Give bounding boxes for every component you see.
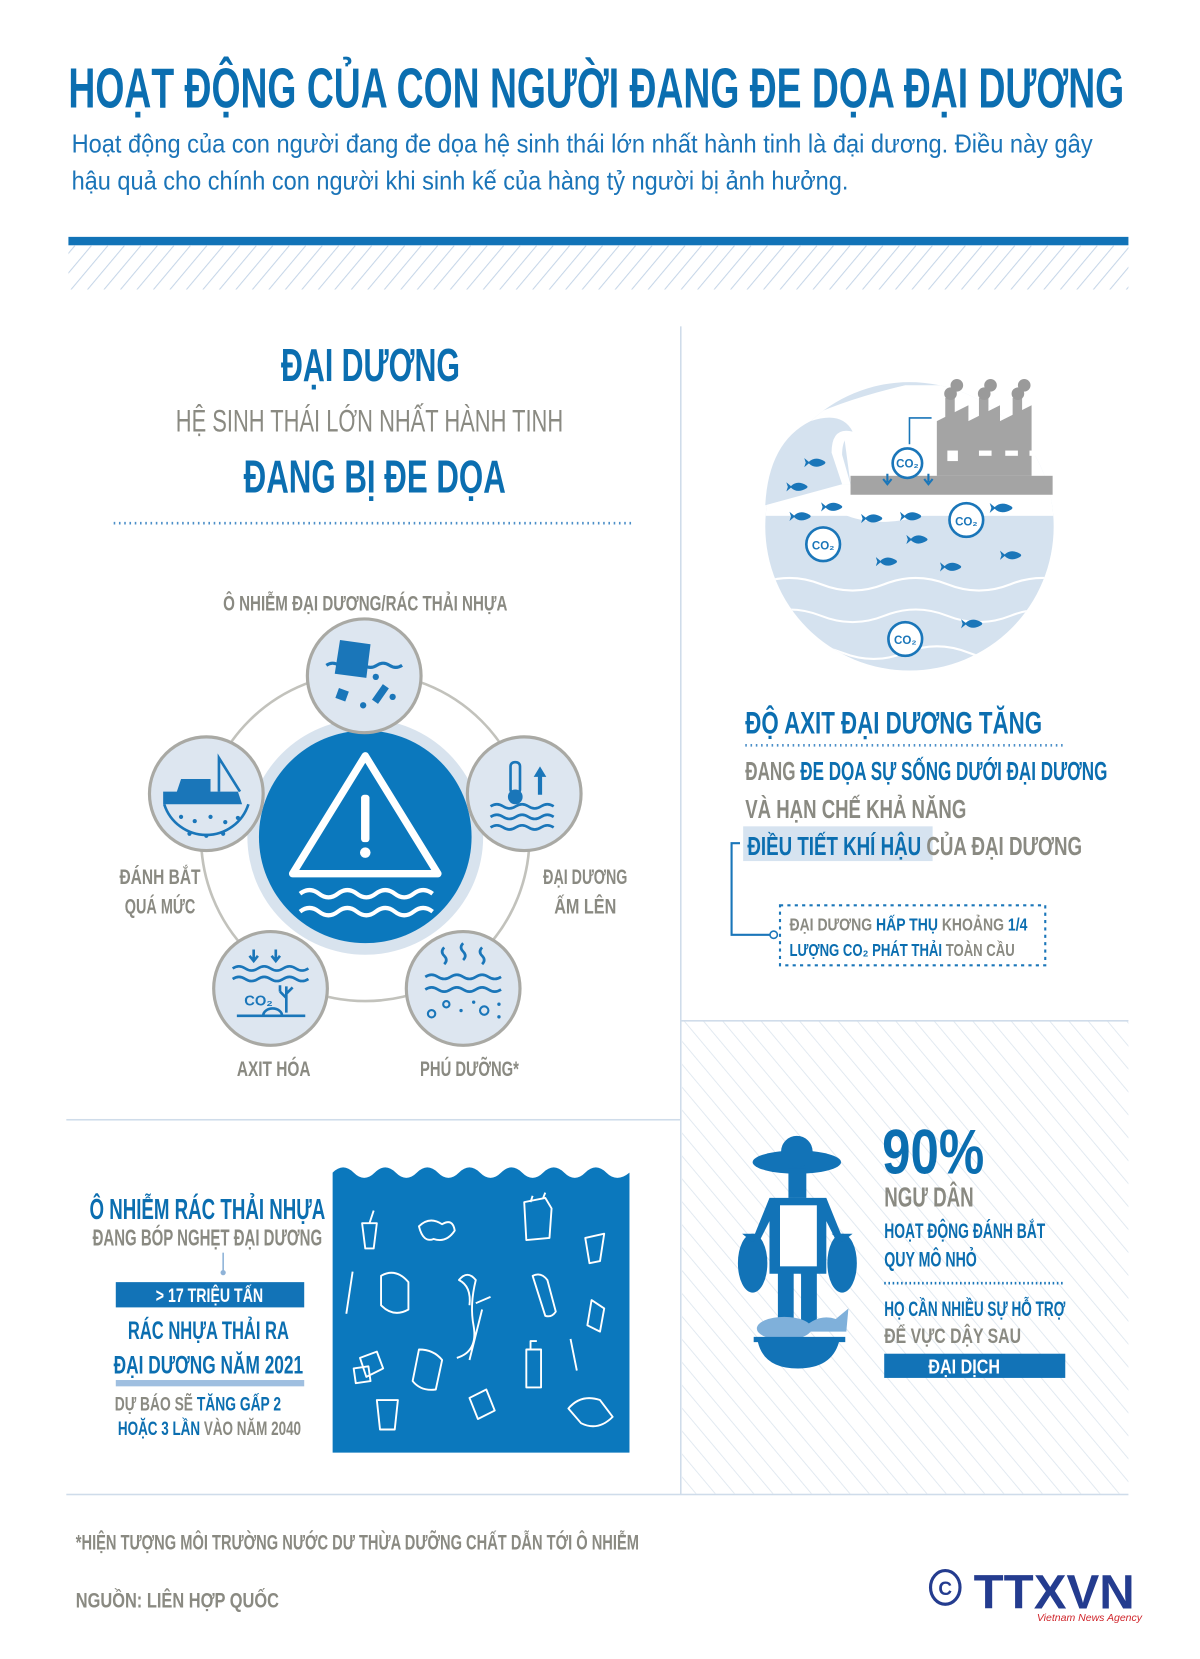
subtitle bbox=[72, 129, 1093, 196]
text block: plastic pollution: Ô NHIỄM RÁC THẢI NHỰA bbox=[89, 1193, 325, 1226]
logo: TTXVN: TTXVN bbox=[974, 1565, 1135, 1619]
threat labels: PHÚ DƯỠNG* bbox=[420, 1057, 520, 1081]
threat labels: ĐẠI DƯƠNG bbox=[543, 866, 627, 889]
logo: TTXVN: C bbox=[938, 1579, 952, 1600]
subtitle: hậu quả cho chính con người khi sinh kế của hàng tỷ người bị ảnh hưởng. bbox=[72, 166, 848, 196]
text block: fishermen stat: HỌ CẦN NHIỀU SỰ HỖ TRỢ bbox=[884, 1297, 1065, 1321]
text block: fishermen stat: HOẠT ĐỘNG ĐÁNH BẮT bbox=[884, 1219, 1045, 1243]
footnote: NGUỒN: LIÊN HỢP QUỐC bbox=[76, 1588, 279, 1612]
illustration: ocean & factory: CO₂ bbox=[955, 516, 978, 528]
icon: warming bbox=[467, 737, 581, 851]
icon: overfishing bbox=[149, 737, 263, 851]
threat labels: ẤM LÊN bbox=[554, 895, 616, 919]
threat labels bbox=[119, 592, 627, 1081]
text block: ocean acidity: VÀ HẠN CHẾ KHẢ NĂNG bbox=[745, 794, 966, 824]
text block: ocean acidity bbox=[732, 705, 1107, 965]
icon: acidification: CO₂ bbox=[244, 993, 273, 1009]
illustration: ocean & factory bbox=[765, 379, 1054, 670]
panel heading: đại dương: ĐẠI DƯƠNG bbox=[281, 339, 460, 391]
subtitle: Hoạt động của con người đang đe dọa hệ sinh thái lớn nhất hành tinh là đại dương. Điều này gây bbox=[72, 129, 1093, 159]
threat labels: AXIT HÓA bbox=[237, 1057, 311, 1081]
logo: TTXVN bbox=[931, 1565, 1143, 1624]
text block: fishermen stat: NGƯ DÂN bbox=[884, 1181, 974, 1212]
logo: TTXVN: Vietnam News Agency bbox=[1037, 1612, 1143, 1624]
text block: ocean acidity: ĐẠI DƯƠNG HẤP THỤ KHOẢNG 1/4 bbox=[789, 914, 1027, 935]
text block: fishermen stat bbox=[882, 1118, 1065, 1379]
text block: fishermen stat: 90% bbox=[882, 1118, 984, 1188]
icon: fisherman bbox=[738, 1136, 857, 1368]
illustration: ocean & factory: CO₂ bbox=[812, 541, 834, 553]
icon: central warning bbox=[247, 719, 483, 955]
illustration: ocean & factory: CO₂ bbox=[896, 458, 919, 470]
panel heading: đại dương bbox=[176, 339, 563, 503]
text block: ocean acidity: LƯỢNG CO₂ PHÁT THẢI TOÀN CẦU bbox=[789, 939, 1015, 960]
panel heading: đại dương: HỆ SINH THÁI LỚN NHẤT HÀNH TINH bbox=[176, 403, 563, 439]
icon: eutrophication bbox=[406, 932, 520, 1045]
text block: plastic pollution: DỰ BÁO SẼ TĂNG GẤP 2 bbox=[115, 1394, 281, 1416]
text block: ocean acidity: ĐỘ AXIT ĐẠI DƯƠNG TĂNG bbox=[745, 705, 1042, 741]
illustration: plastic in ocean bbox=[333, 1167, 629, 1453]
threat labels: Ô NHIỄM ĐẠI DƯƠNG/RÁC THẢI NHỰA bbox=[223, 592, 507, 616]
text block: plastic pollution: ĐẠI DƯƠNG NĂM 2021 bbox=[114, 1351, 303, 1380]
icon: pollution bbox=[307, 619, 421, 733]
panel heading: đại dương: ĐANG BỊ ĐE DỌA bbox=[244, 451, 506, 503]
icon: acidification bbox=[214, 932, 327, 1045]
header band bbox=[68, 237, 1128, 290]
threat labels: QUÁ MỨC bbox=[125, 895, 195, 919]
text block: ocean acidity: ĐIỀU TIẾT KHÍ HẬU CỦA ĐẠI DƯƠNG bbox=[747, 831, 1082, 861]
text block: plastic pollution: > 17 TRIỆU TẤN bbox=[156, 1285, 263, 1307]
text block: plastic pollution: HOẶC 3 LẦN VÀO NĂM 2040 bbox=[118, 1418, 301, 1440]
hatched panel background bbox=[682, 1021, 1128, 1494]
text block: plastic pollution: RÁC NHỰA THẢI RA bbox=[128, 1315, 289, 1345]
text block: plastic pollution bbox=[89, 1193, 325, 1440]
illustration: ocean & factory: CO₂ bbox=[894, 635, 917, 647]
text block: fishermen stat: ĐỂ VỰC DẬY SAU bbox=[884, 1324, 1021, 1348]
threat diagram bbox=[149, 619, 581, 1045]
text block: fishermen stat: QUY MÔ NHỎ bbox=[884, 1247, 977, 1271]
threat labels: ĐÁNH BẮT bbox=[119, 865, 201, 889]
text block: plastic pollution: ĐANG BÓP NGHẸT ĐẠI DƯƠNG bbox=[93, 1223, 322, 1250]
text block: fishermen stat: ĐẠI DỊCH bbox=[928, 1357, 1000, 1379]
footnote: *HIỆN TƯỢNG MÔI TRƯỜNG NƯỚC DƯ THỪA DƯỠNG CHẤT DẪN TỚI Ô NHIỄM bbox=[76, 1531, 639, 1555]
footnote bbox=[76, 1531, 639, 1612]
